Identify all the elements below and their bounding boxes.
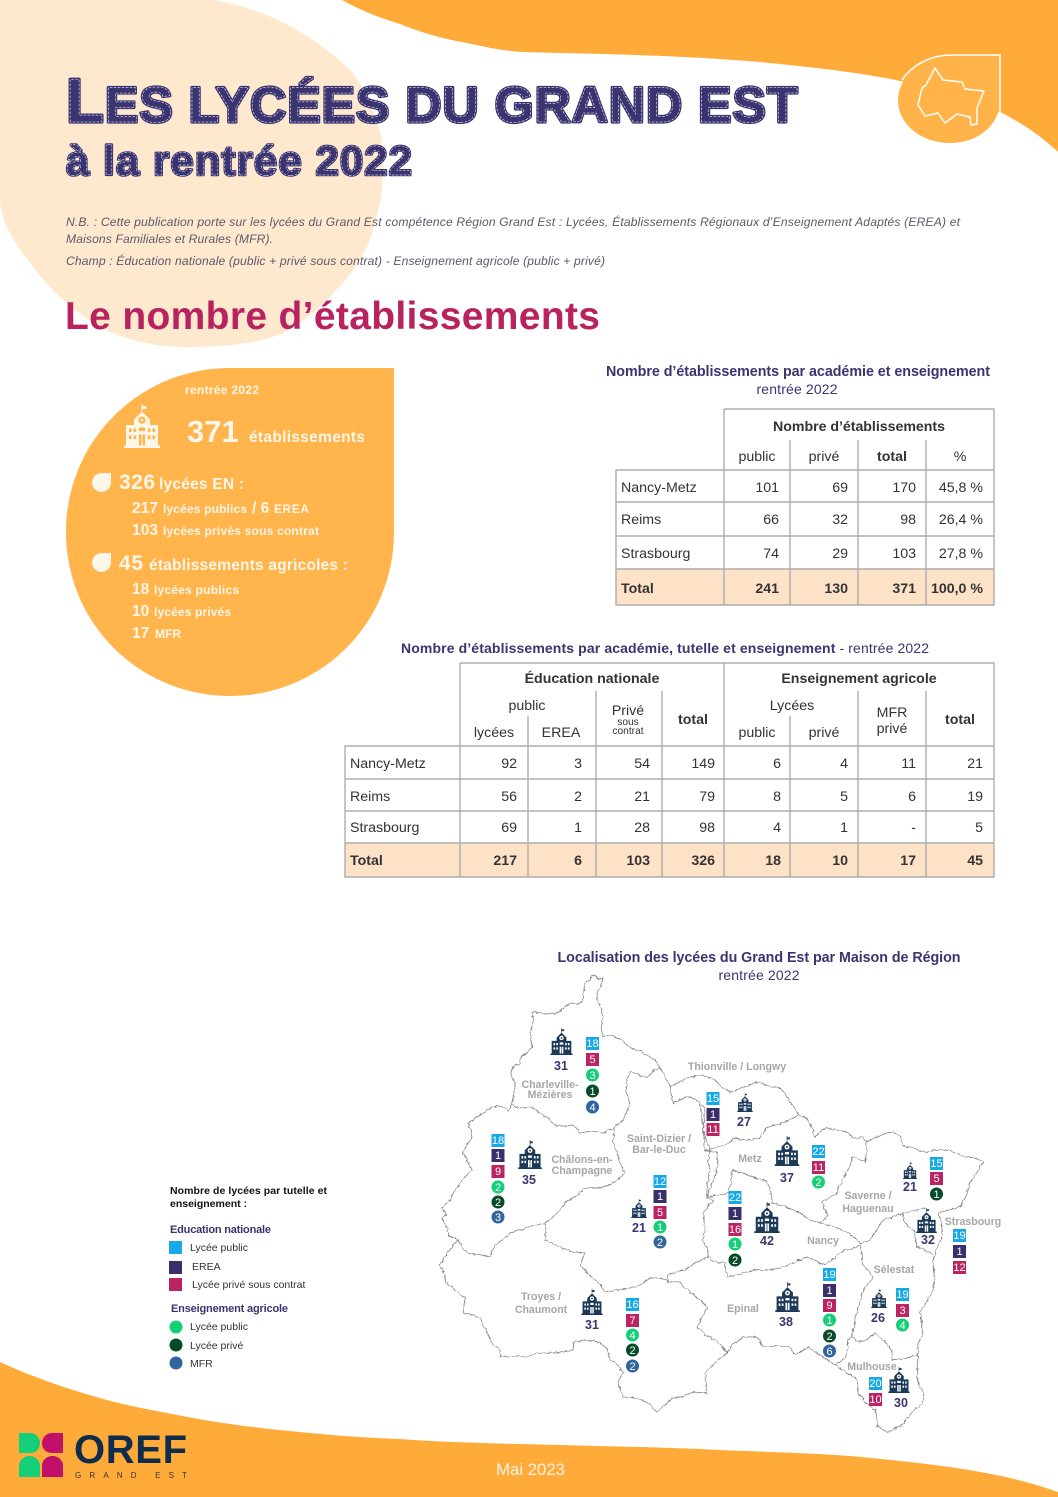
note text: N.B. : Cette publication porte sur les lycées du Grand Est compétence Région Grand Est : Lycées, Établissements Régionaux d’Enseignement Adaptés (EREA) et — [66, 214, 961, 229]
table 2: Strasbourg — [350, 820, 419, 836]
table 2: 11 — [901, 756, 916, 772]
map data: Saverne / Haguenau: 1 — [933, 1189, 940, 1201]
map data: Saint-Dizier / Bar-le-Duc: 12 — [654, 1176, 666, 1188]
legend: Education nationale — [170, 1224, 271, 1236]
map data: Saint-Dizier / Bar-le-Duc: 1 — [657, 1191, 663, 1203]
map data: Charleville-Mézières: 18 — [586, 1038, 599, 1050]
bullet: établissements agricoles: 10 — [132, 603, 149, 620]
title: à la rentrée 2022 — [66, 137, 413, 184]
table 1: 371 — [892, 581, 916, 597]
map data: Châlons-en-Champagne — [492, 1134, 542, 1224]
map data: Troyes / Chaumont: 31 — [585, 1318, 599, 1332]
region labels: Charleville- — [521, 1079, 579, 1091]
table 2: 5 — [840, 789, 848, 805]
bullet: lycées EN: / 6 — [252, 500, 270, 517]
map data: Nancy: 1 — [732, 1208, 738, 1220]
bottom orange wave — [0, 1362, 1058, 1497]
map data: Charleville-Mézières — [550, 1028, 599, 1114]
map data: Troyes / Chaumont — [581, 1289, 639, 1373]
map data: Sélestat — [871, 1288, 909, 1332]
bullet: établissements agricoles: lycées publics — [154, 583, 239, 597]
table 2: 10 — [832, 853, 848, 869]
map data: Mulhouse: 20 — [869, 1378, 882, 1390]
table 2: 98 — [699, 820, 715, 836]
map data: Châlons-en-Champagne: 9 — [495, 1166, 501, 1178]
map title — [558, 950, 960, 983]
map data: Metz: 11 — [813, 1162, 824, 1174]
legend: Lycée public — [190, 1321, 248, 1333]
title: LES LYCÉES DU GRAND EST — [66, 67, 799, 136]
table 1 title: Nombre d’établissements par académie et enseignement — [606, 364, 990, 380]
table 1 title — [606, 364, 990, 397]
map data: Thionville / Longwy: 11 — [707, 1124, 719, 1136]
map data: Châlons-en-Champagne: 2 — [495, 1182, 501, 1194]
table 2: 45 — [967, 853, 983, 869]
table 1: 103 — [892, 546, 916, 562]
table 2: 4 — [773, 820, 781, 836]
map data: Epinal: 6 — [826, 1346, 833, 1358]
map data: Saint-Dizier / Bar-le-Duc: 5 — [657, 1207, 663, 1219]
table 2: contrat — [612, 726, 644, 737]
map data: Metz: 22 — [812, 1146, 825, 1158]
map data: Epinal: 1 — [826, 1315, 833, 1327]
table 2: 69 — [501, 820, 517, 836]
map data: Troyes / Chaumont: 2 — [629, 1361, 636, 1373]
table 2: Lycées — [770, 698, 814, 714]
table 1: public — [738, 449, 776, 465]
table 2: 6 — [574, 853, 582, 869]
table 1: total — [877, 449, 907, 465]
table 1: privé — [809, 449, 839, 465]
table 1: 100,0 % — [931, 581, 983, 597]
table 1: Nombre d’établissements — [773, 419, 945, 435]
map data: Troyes / Chaumont: 2 — [629, 1345, 636, 1357]
table 2: 92 — [501, 756, 517, 772]
map data: Saint-Dizier / Bar-le-Duc — [631, 1175, 666, 1249]
map data: Troyes / Chaumont: 16 — [626, 1299, 639, 1311]
table 1: 101 — [755, 480, 779, 496]
bullet: établissements agricoles: 18 — [132, 581, 150, 598]
legend: Enseignement agricole — [171, 1303, 288, 1315]
icon: school — [124, 404, 160, 448]
bullet: établissements agricoles: lycées privés — [154, 605, 231, 619]
table 2: 17 — [900, 853, 916, 869]
table 2: 56 — [501, 789, 517, 805]
map data: Charleville-Mézières: 5 — [589, 1054, 596, 1066]
panel: key figures drop: rentrée 2022 — [185, 383, 259, 397]
section heading: Le nombre d’établissements — [65, 295, 600, 338]
table 1: 27,8 % — [939, 546, 983, 562]
table 1: Strasbourg — [621, 546, 690, 562]
note text: Maisons Familiales et Rurales (MFR). — [66, 232, 273, 246]
map data: Metz — [775, 1136, 825, 1189]
table 2: 3 — [574, 756, 582, 772]
legend: enseignement : — [170, 1198, 247, 1210]
map: Grand Est territories — [440, 975, 983, 1432]
bullet: établissements agricoles: 17 — [132, 625, 149, 642]
table 1: Total — [621, 581, 654, 597]
map data: Charleville-Mézières: 31 — [554, 1059, 568, 1073]
map data: Thionville / Longwy: 1 — [710, 1109, 716, 1121]
map data: Thionville / Longwy: 15 — [707, 1093, 719, 1105]
map data: Saverne / Haguenau: 5 — [933, 1173, 940, 1185]
map data: Nancy — [728, 1191, 780, 1267]
bullet: établissements agricoles — [92, 552, 348, 642]
region labels — [515, 1061, 1001, 1373]
table 2: sous — [617, 717, 639, 728]
total figure: établissements — [249, 429, 365, 446]
table 2: 6 — [773, 756, 781, 772]
map data: Sélestat: 3 — [899, 1305, 906, 1317]
table 2: - — [911, 820, 916, 836]
top orange wave — [342, 0, 1058, 152]
map data: Saint-Dizier / Bar-le-Duc: 2 — [657, 1237, 663, 1249]
map data: Epinal: 2 — [826, 1331, 833, 1343]
bullet: lycées EN: 217 — [132, 500, 158, 517]
region labels: Bar-le-Duc — [632, 1144, 686, 1156]
map data: Nancy: 22 — [729, 1192, 741, 1204]
table 1: Nancy-Metz — [621, 480, 697, 496]
panel: key figures drop — [66, 368, 394, 696]
legend: Nombre de lycées par tutelle et — [170, 1185, 328, 1197]
map data: Strasbourg — [916, 1208, 966, 1274]
table 2: public — [738, 725, 776, 741]
map data: Metz: 2 — [815, 1177, 822, 1189]
table 1: 74 — [763, 546, 779, 562]
legend: EREA — [192, 1261, 221, 1273]
region labels: Strasbourg — [945, 1216, 1001, 1228]
map data: Saint-Dizier / Bar-le-Duc: 1 — [657, 1222, 663, 1234]
table 1: 32 — [832, 512, 848, 528]
table 2: 18 — [765, 853, 781, 869]
region labels: Mulhouse — [847, 1361, 897, 1373]
legend: MFR — [190, 1358, 213, 1370]
bullet: lycées EN: lycées EN : — [159, 476, 244, 493]
logo: OREF Grand Est — [19, 1428, 187, 1480]
map data: Saverne / Haguenau — [903, 1157, 943, 1201]
table 1: 241 — [755, 581, 779, 597]
table 2: 8 — [773, 789, 781, 805]
table 2: total — [945, 712, 975, 728]
title: à la rentrée 2022 — [66, 137, 413, 184]
table 2: Nancy-Metz — [350, 756, 426, 772]
date: Mai 2023 — [496, 1460, 565, 1479]
map data: Nancy: 42 — [760, 1234, 774, 1248]
title — [66, 67, 799, 184]
note text: Champ : Éducation nationale (public + privé sous contrat) - Enseignement agricole (public + privé) — [66, 253, 605, 268]
map data: Châlons-en-Champagne: 35 — [522, 1173, 536, 1187]
table 1: 45,8 % — [939, 480, 983, 496]
region labels: Sélestat — [874, 1264, 915, 1276]
region labels: Metz — [738, 1153, 762, 1165]
map data: Nancy: 1 — [732, 1239, 738, 1251]
region labels: Saverne / — [844, 1190, 892, 1202]
map data: Epinal: 1 — [826, 1285, 833, 1297]
map data: Sélestat: 19 — [896, 1289, 909, 1301]
table 2: 5 — [975, 820, 983, 836]
table 2: 217 — [493, 853, 517, 869]
legend: Lycée public — [190, 1242, 248, 1254]
table 2: privé — [809, 725, 839, 741]
table 1: 98 — [900, 512, 916, 528]
map title: rentrée 2022 — [718, 967, 800, 983]
map data: Strasbourg: 1 — [956, 1246, 963, 1258]
table 1: 66 — [763, 512, 779, 528]
map data: Strasbourg: 19 — [953, 1230, 966, 1242]
map data: Strasbourg: 12 — [953, 1262, 966, 1274]
table 2 — [345, 663, 994, 877]
table 2: 1 — [574, 820, 582, 836]
table 1: 29 — [832, 546, 848, 562]
total figure: 371 — [187, 414, 239, 449]
table 2: 79 — [699, 789, 715, 805]
map data: Saverne / Haguenau: 15 — [930, 1158, 943, 1170]
table 1: 170 — [892, 480, 916, 496]
logo: OREF Grand Est: OREF — [74, 1428, 187, 1472]
table 2: lycées — [474, 725, 514, 741]
note text — [66, 214, 961, 268]
bullet: lycées EN: lycées publics — [163, 502, 247, 516]
table 1: 130 — [824, 581, 848, 597]
region labels: Mézières — [528, 1089, 572, 1101]
table 2: 4 — [840, 756, 848, 772]
legend: Lycée privé — [190, 1340, 243, 1352]
table 2 title: Nombre d’établissements par académie, tutelle et enseignement - rentrée 2022 — [401, 640, 929, 656]
logo: OREF Grand Est: GRAND EST — [75, 1471, 187, 1480]
map data: Châlons-en-Champagne: 1 — [495, 1150, 501, 1162]
map data: Mulhouse: 10 — [869, 1394, 882, 1406]
table 2: 21 — [967, 756, 983, 772]
map data: Châlons-en-Champagne: 18 — [492, 1135, 504, 1147]
bullet: lycées EN: EREA — [274, 502, 309, 516]
region labels: Champagne — [552, 1165, 612, 1177]
table 2: total — [678, 712, 708, 728]
background blob: cream — [0, 0, 383, 347]
map data: Châlons-en-Champagne: 3 — [495, 1212, 501, 1224]
table 2: 2 — [574, 789, 582, 805]
region labels: Chaumont — [515, 1304, 568, 1316]
table 2: 54 — [634, 756, 650, 772]
table 2: 19 — [967, 789, 983, 805]
region labels: Haguenau — [842, 1203, 894, 1215]
region labels: Nancy — [807, 1235, 839, 1247]
map data: Châlons-en-Champagne: 2 — [495, 1197, 501, 1209]
map data: Mulhouse — [869, 1367, 910, 1410]
table 2: 21 — [634, 789, 650, 805]
map data: Sélestat: 4 — [899, 1320, 906, 1332]
table 2: public — [508, 698, 546, 714]
bullet: établissements agricoles: MFR — [155, 627, 181, 641]
map data: Strasbourg: 32 — [921, 1233, 935, 1247]
table 2: privé — [877, 721, 907, 737]
bullet: établissements agricoles: établissements agricoles : — [149, 557, 348, 574]
map data: Nancy: 2 — [732, 1255, 738, 1267]
map data: Sélestat: 26 — [871, 1311, 885, 1325]
map data: Epinal: 9 — [826, 1300, 833, 1312]
table 2: Éducation nationale — [525, 670, 660, 687]
map data: Thionville / Longwy — [706, 1092, 753, 1136]
table 2: Enseignement agricole — [781, 671, 937, 687]
map data: Metz: 37 — [780, 1171, 794, 1185]
table 2: 28 — [634, 820, 650, 836]
map data: Mulhouse: 30 — [894, 1396, 908, 1410]
region labels: Thionville / Longwy — [688, 1061, 786, 1073]
title: LES LYCÉES DU GRAND EST — [66, 67, 799, 136]
table 1: 26,4 % — [939, 512, 983, 528]
map data: Charleville-Mézières: 3 — [589, 1070, 596, 1082]
map data: Troyes / Chaumont: 7 — [629, 1315, 636, 1327]
table 2: 149 — [691, 756, 715, 772]
bullet: lycées EN: 326 — [119, 471, 155, 494]
bullet: lycées EN: 103 — [132, 522, 158, 539]
bullet: établissements agricoles: 45 — [119, 552, 143, 575]
table 2: EREA — [542, 725, 581, 741]
icon: leaf with Grand Est region outline — [898, 55, 1000, 143]
table 1 — [616, 409, 994, 605]
table 2: Reims — [350, 789, 390, 805]
table 2: Total — [350, 853, 383, 869]
map data: Charleville-Mézières: 4 — [589, 1102, 596, 1114]
legend: Lycée privé sous contrat — [192, 1279, 306, 1291]
table 2: 103 — [626, 853, 650, 869]
table 2: 1 — [840, 820, 848, 836]
table 1: 69 — [832, 480, 848, 496]
region labels: Epinal — [727, 1303, 759, 1315]
legend — [169, 1185, 328, 1370]
map data: Epinal: 19 — [823, 1269, 836, 1281]
map data: Troyes / Chaumont: 4 — [629, 1330, 636, 1342]
table 2: 326 — [691, 853, 715, 869]
map data: Epinal — [775, 1268, 836, 1358]
table 1: Reims — [621, 512, 661, 528]
map data: Nancy: 16 — [729, 1224, 741, 1236]
table 2: Privé — [612, 703, 644, 719]
bullet: lycées EN: lycées privés sous contrat — [163, 524, 319, 538]
total figure — [187, 414, 365, 449]
region labels: Châlons-en- — [551, 1154, 613, 1166]
map data: Saverne / Haguenau: 21 — [903, 1180, 917, 1194]
map data: Charleville-Mézières: 1 — [589, 1086, 596, 1098]
table 2: MFR — [877, 705, 907, 721]
table 1: % — [954, 449, 967, 465]
bullet: lycées EN — [92, 471, 319, 539]
table 1 title: rentrée 2022 — [756, 381, 838, 397]
map data: Thionville / Longwy: 27 — [737, 1115, 751, 1129]
map data: Epinal: 38 — [779, 1315, 793, 1329]
region labels: Saint-Dizier / — [627, 1133, 691, 1145]
region labels: Troyes / — [521, 1291, 561, 1303]
map title: Localisation des lycées du Grand Est par Maison de Région — [558, 950, 960, 966]
map data: Saint-Dizier / Bar-le-Duc: 21 — [632, 1221, 646, 1235]
table 2: 6 — [908, 789, 916, 805]
